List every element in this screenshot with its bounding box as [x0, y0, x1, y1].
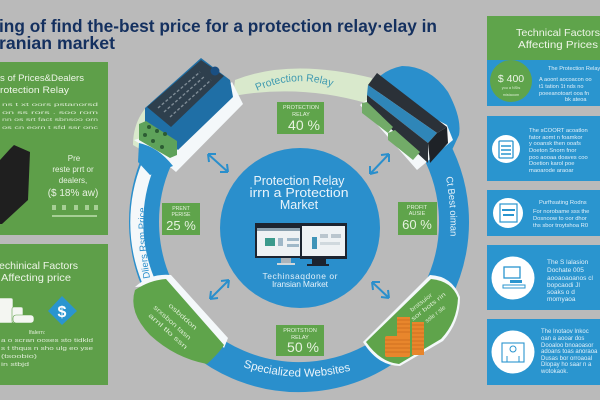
center circle: Market — [280, 198, 319, 212]
icon: price circle — [490, 60, 532, 102]
panel: right card 5: Dlopay ho saar n a — [541, 362, 592, 368]
panel: right card 3: For norobame sss the — [533, 209, 589, 215]
panel: right card 2 — [487, 116, 600, 181]
panel: prices and dealers: nn os srt fact sbnsoo orn — [2, 117, 99, 123]
ring label: best: Ct Best oiman — [446, 176, 458, 236]
diagram: ring — [129, 66, 469, 392]
icon: price circle: $ 400 — [498, 73, 524, 85]
badge: 40%: PROTECTION — [283, 105, 319, 111]
panel: right card 2: poo aooaa doaves coo — [529, 155, 588, 161]
panel: right card 4: soaks o d — [547, 289, 575, 296]
center circle: irrn a Protection — [250, 186, 349, 200]
icon: blue relay — [134, 58, 243, 175]
center circle — [220, 148, 380, 308]
icon: dollar diamond: $ — [58, 304, 67, 321]
badge: 40%: RELAY — [292, 112, 310, 118]
segment: green lower left: arnl tlo ssn — [147, 312, 189, 351]
panel: prices and dealers — [0, 62, 108, 235]
center circle: Iransian Market — [272, 279, 329, 289]
segment: green lower right with coins: brstsuior — [410, 293, 434, 314]
panel: prices and dealers: dealers, — [59, 176, 87, 185]
panel: prices and dealers: on ss rors . soo rom — [2, 110, 98, 116]
segment: green lower right with coins: ssle r sle — [425, 305, 448, 325]
panel: right card 5: Dusas bor orroaoal — [541, 356, 592, 362]
title — [0, 16, 437, 53]
icon: monitors — [255, 223, 347, 266]
badge: 25%: 25 % — [166, 218, 196, 233]
panel: prices and dealers: ($ 18% aw) — [48, 188, 98, 199]
panel: right card 2: maoarode araoar — [529, 168, 574, 174]
badge: 25%: PERISE — [171, 212, 191, 218]
arrow: upper left — [208, 154, 228, 172]
panel: right card 1: The Protection Relay — [548, 66, 600, 72]
segment: green lower left: osbddon — [167, 302, 198, 332]
blue top right bubble — [372, 66, 460, 150]
panel: right card 4: bopcaodi Jl — [547, 282, 580, 289]
panel: prices and dealers: Pre — [68, 154, 81, 163]
panel: right card 1: poeeanotoart ooa fn — [539, 91, 589, 97]
panel: right card 5 — [487, 319, 600, 385]
panel: right card 2: fator aomt n foamkor — [529, 135, 583, 141]
panel: right card 3: Dosnoow to oor dhor — [533, 216, 587, 222]
right header: Affecting Prices — [518, 39, 598, 51]
badge: 50% — [276, 325, 324, 356]
title: ing of find the-best price for a protection relay·elay in — [0, 16, 437, 36]
panel: prices and dealers: s of Prices&Dealers — [0, 73, 84, 84]
panel: technical factors left: s t thqus n sho ulg eo yse — [1, 346, 93, 352]
icon: certificate circle — [492, 330, 534, 374]
arrow: lower left — [210, 280, 229, 299]
badge: 60%: 60 % — [402, 217, 432, 232]
panel: prices and dealers: ns t xt oors pstanorsd — [2, 102, 99, 108]
panel: right card 5: adoans toas anoraoa — [541, 349, 598, 355]
panel: right card 3: Purfhsating Rodns — [539, 200, 587, 206]
badge: 60%: AUSIE — [409, 211, 426, 217]
right header: Technical Factors — [516, 27, 600, 39]
panel: right card 4: Dochate 005 — [547, 267, 584, 274]
arrow: upper right — [370, 154, 389, 174]
panel: right card 4 — [487, 245, 600, 310]
panel: right card 5: Dooaloo bnoaoasor — [541, 343, 593, 349]
icon: price circle: mistaoom — [503, 93, 519, 97]
badge: 40%: 40 % — [288, 117, 320, 133]
panel: right card 2: Doeton Snorn fnor — [529, 148, 576, 154]
icon: black relay — [0, 145, 30, 224]
arrow: lower right — [372, 282, 389, 298]
panel: right card 3 — [487, 190, 600, 236]
panel: right card 5: The Inotaov Inkoc — [541, 329, 589, 335]
panel: right card 5: oan a aooar dos — [541, 336, 584, 342]
panel: right card 2: Doetion karol poe — [529, 161, 574, 167]
badge: 25% — [162, 203, 200, 235]
segment: green lower left: srxsbon tasn — [152, 304, 192, 342]
panel: right card 4: aooaoaoanos cl — [547, 275, 593, 282]
badge: 50%: 50 % — [287, 339, 319, 355]
panel: technical factors left: Affecting price — [1, 272, 71, 284]
icon: multi-terminal relay — [360, 73, 453, 170]
white strip on left ring — [137, 165, 148, 280]
panel: prices and dealers: os cn eorn t sfd ssr onc — [2, 125, 99, 131]
panel: technical factors left: a o scran ooses sto tidkld — [1, 338, 93, 344]
panel: technical factors left: Ifalern: — [29, 330, 46, 336]
title: ranian market — [0, 33, 115, 53]
icon: computer circle — [492, 256, 534, 300]
panel: prices and dealers: reste prrt or — [52, 165, 94, 174]
icon: price circle: you a NSts — [502, 86, 520, 90]
panel: right card 2: y ooansk then ooafs — [529, 141, 581, 147]
badge: 60%: PROFIT — [407, 205, 428, 211]
badge: 50%: PROITSTION — [283, 328, 317, 334]
icon: orange coins — [385, 317, 424, 357]
icon: form circle — [493, 198, 523, 228]
panel: technical factors left: in stbjd — [1, 362, 29, 368]
panel: technical factors left: (tsoobio) — [1, 354, 37, 360]
panel: right card 5: wotokaok. — [540, 369, 568, 375]
icon: dollar diamond — [48, 296, 77, 325]
segment: green lower right with coins — [363, 275, 460, 366]
icon: stacked coins — [0, 298, 34, 323]
icon: document circle — [492, 135, 520, 163]
blue ring arc — [144, 140, 454, 377]
panel: right card 4: momyaoa — [547, 296, 576, 303]
panel: technical factors left — [0, 244, 108, 385]
ring label: price left: Dliers Rsm Price — [138, 208, 150, 278]
panel: prices and dealers: rotection Relay — [0, 85, 69, 96]
panel: right card 2: The sCOORT acoatlon — [529, 128, 588, 134]
panel: right card 1 — [487, 60, 600, 106]
center circle: Techinsaqdone or — [262, 271, 338, 281]
segment: green lower left — [133, 275, 228, 364]
ring label: protection relay: Protection Relay — [255, 74, 334, 90]
light green arc — [233, 68, 372, 103]
center circle: Protection Relay — [254, 174, 345, 188]
panel: technical factors left: echinical Factors — [0, 260, 78, 272]
right header — [487, 16, 600, 60]
badge: 40% — [277, 102, 324, 134]
segment: green lower right with coins: sor bots rin — [411, 292, 447, 323]
ring label: specialized websites: Specialized Websites — [244, 360, 350, 377]
panel: right card 1: bk ateoa — [565, 97, 587, 103]
badge: 25%: PRENT — [172, 206, 191, 212]
panel: right card 3: ths sbor troytshoa R0 — [533, 223, 588, 229]
panel: right card 1: A aoont aocoacon oo — [539, 77, 592, 83]
panel: right card 4: The S lalasion — [547, 259, 589, 266]
badge: 60% — [398, 202, 437, 235]
badge: 50%: RELAY — [291, 335, 309, 341]
panel: right card 1: t1 tation 1t nds no — [539, 84, 583, 90]
